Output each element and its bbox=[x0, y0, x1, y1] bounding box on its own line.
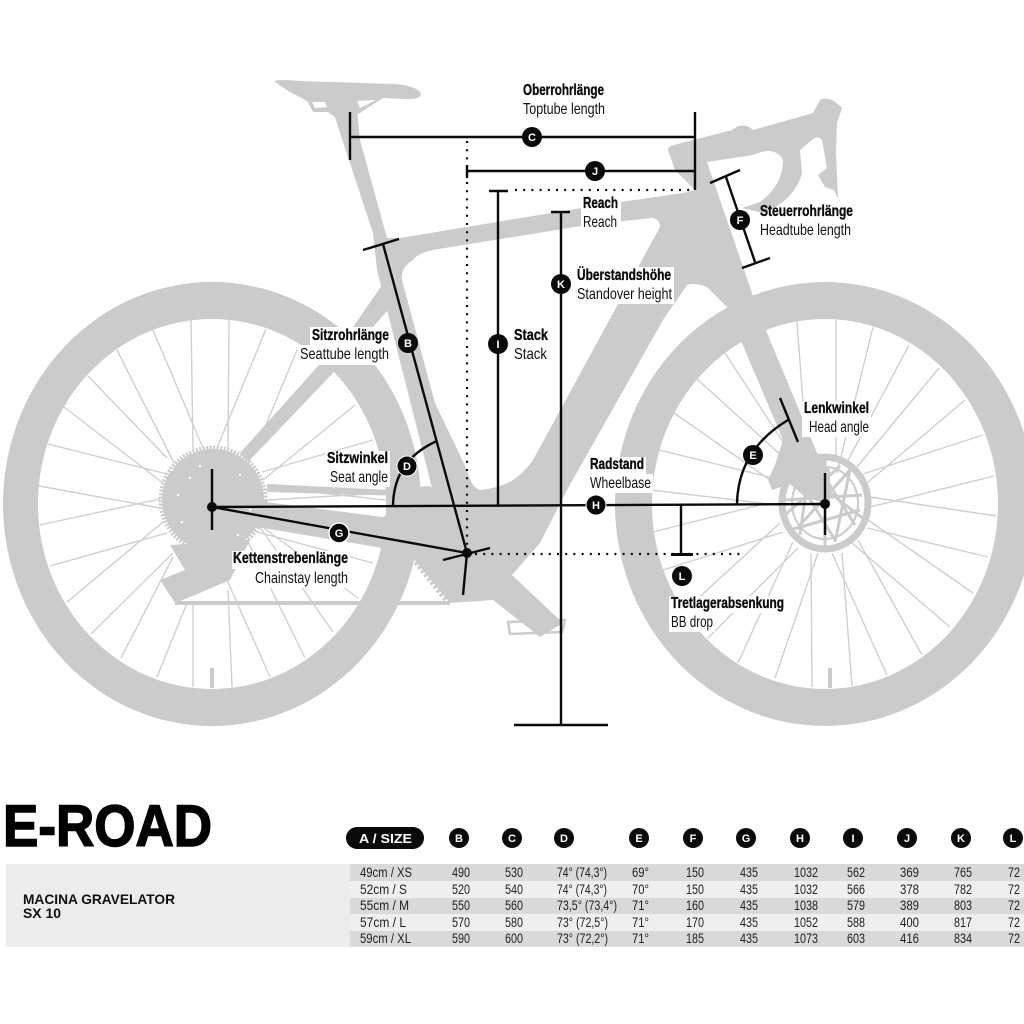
dimension C: toptube length: C bbox=[528, 132, 536, 144]
label: standover height: Standover height bbox=[577, 286, 672, 303]
fork and brake caliper bbox=[735, 293, 830, 505]
row 52cm: 540 bbox=[505, 882, 523, 897]
dimension G: chainstay length: G bbox=[335, 528, 343, 540]
label: wheelbase: Radstand bbox=[590, 456, 644, 473]
dimension E: head angle bbox=[737, 398, 798, 504]
dimension G: chainstay length bbox=[212, 507, 472, 558]
row 55cm bbox=[360, 898, 1020, 913]
label: stack bbox=[514, 327, 548, 363]
row 55cm: 72 bbox=[1008, 898, 1020, 913]
row 57cm: 73° (72,5°) bbox=[557, 915, 608, 930]
row 52cm: 70° bbox=[632, 882, 649, 897]
row 52cm bbox=[360, 882, 1020, 897]
row 59cm: 603 bbox=[847, 931, 865, 946]
column badges: L bbox=[1010, 833, 1017, 845]
label: seattube length: Sitzrohrlänge bbox=[312, 327, 389, 344]
label: reach: Reach bbox=[583, 214, 617, 231]
title: E-ROAD bbox=[3, 794, 212, 859]
table header bbox=[346, 827, 1023, 849]
dimension K: standover height bbox=[514, 212, 608, 725]
dimension F: headtube length: F bbox=[737, 215, 744, 227]
row 57cm bbox=[360, 915, 1020, 930]
label: BB drop: Tretlagerabsenkung bbox=[671, 595, 784, 612]
row 57cm: 588 bbox=[847, 915, 865, 930]
rear wheel spokes bbox=[39, 320, 385, 687]
row 49cm: 150 bbox=[686, 865, 704, 880]
row 55cm: 160 bbox=[686, 898, 704, 913]
label: wheelbase bbox=[588, 456, 653, 493]
label: head angle bbox=[802, 400, 871, 437]
row 59cm: 185 bbox=[686, 931, 704, 946]
label: headtube length: Steuerrohrlänge bbox=[760, 203, 853, 220]
valves bbox=[210, 668, 832, 688]
geometry table bbox=[350, 864, 1024, 947]
row 49cm: 74° (74,3°) bbox=[557, 865, 607, 880]
row 49cm: 72 bbox=[1008, 865, 1020, 880]
row 49cm: 765 bbox=[954, 865, 972, 880]
row 59cm: 59cm / XL bbox=[360, 931, 411, 946]
model panel bbox=[6, 864, 350, 947]
row 57cm: 170 bbox=[686, 915, 704, 930]
column badges: C bbox=[508, 833, 516, 845]
row 52cm: 782 bbox=[954, 882, 972, 897]
row 52cm: 150 bbox=[686, 882, 704, 897]
row 52cm: 52cm / S bbox=[360, 882, 407, 897]
row 57cm: 435 bbox=[740, 915, 758, 930]
column badges: E bbox=[635, 833, 643, 845]
row 55cm: 435 bbox=[740, 898, 758, 913]
label: standover height bbox=[575, 265, 674, 304]
row 55cm: 579 bbox=[847, 898, 865, 913]
dimension B: seattube length bbox=[363, 239, 490, 595]
column badges: I bbox=[851, 833, 855, 845]
label: seat angle bbox=[325, 450, 390, 487]
front wheel rim bbox=[615, 282, 1024, 726]
row 55cm: 803 bbox=[954, 898, 972, 913]
row 52cm: 1032 bbox=[794, 882, 818, 897]
row 55cm: 1038 bbox=[794, 898, 818, 913]
row 49cm: 1032 bbox=[794, 865, 818, 880]
row 52cm: 72 bbox=[1008, 882, 1020, 897]
label: BB drop: BB drop bbox=[671, 614, 713, 631]
row 52cm: 74° (74,3°) bbox=[557, 882, 607, 897]
row 59cm: 1073 bbox=[794, 931, 818, 946]
row 49cm: 369 bbox=[900, 865, 919, 880]
lower stay band bbox=[267, 484, 440, 497]
rear derailleur bbox=[160, 540, 250, 603]
rear wheel rim bbox=[3, 282, 421, 726]
frame, stem and handlebar bbox=[250, 99, 842, 637]
row 52cm: 520 bbox=[452, 882, 470, 897]
column badges: F bbox=[690, 833, 697, 845]
row 57cm: 71° bbox=[632, 915, 649, 930]
row 49cm bbox=[360, 865, 1020, 880]
model name bbox=[23, 891, 175, 921]
label: toptube length bbox=[523, 82, 605, 118]
dimension B: seattube length: B bbox=[404, 338, 412, 350]
dimension H: wheelbase: H bbox=[592, 500, 600, 512]
row 57cm: 400 bbox=[900, 915, 919, 930]
chainring teeth bbox=[413, 558, 449, 603]
row 59cm: 435 bbox=[740, 931, 758, 946]
label: chainstay length bbox=[232, 550, 350, 588]
label: seattube length bbox=[298, 327, 391, 365]
dimension L: BB drop bbox=[671, 505, 693, 586]
column badges: B bbox=[455, 833, 463, 845]
dimension I: stack: I bbox=[496, 339, 500, 351]
saddle bbox=[274, 80, 421, 117]
label: seat angle: Sitzwinkel bbox=[327, 450, 388, 467]
dimension D: seat angle bbox=[393, 441, 437, 505]
column badges: H bbox=[796, 833, 804, 845]
chain bbox=[175, 601, 450, 605]
column badges bbox=[449, 828, 1023, 848]
row backgrounds bbox=[350, 864, 1024, 947]
row 57cm: 570 bbox=[452, 915, 470, 930]
label: head angle: Head angle bbox=[809, 419, 869, 436]
row 49cm: 490 bbox=[452, 865, 470, 880]
row 55cm: 560 bbox=[505, 898, 523, 913]
row 59cm: 600 bbox=[505, 931, 523, 946]
row 59cm: 73° (72,2°) bbox=[557, 931, 608, 946]
bicycle silhouette bbox=[3, 80, 1024, 726]
label: seattube length: Seattube length bbox=[300, 346, 389, 363]
label: standover height: Überstandshöhe bbox=[577, 265, 671, 284]
label: stack: Stack bbox=[514, 346, 548, 363]
size pill bbox=[346, 827, 424, 849]
row 55cm: 550 bbox=[452, 898, 470, 913]
row 59cm: 71° bbox=[632, 931, 649, 946]
row 57cm: 580 bbox=[505, 915, 523, 930]
dimension H: wheelbase bbox=[207, 469, 830, 535]
dimension E: head angle: E bbox=[749, 450, 757, 462]
size pill: A / SIZE bbox=[359, 831, 412, 846]
row 59cm bbox=[360, 931, 1020, 946]
label: headtube length bbox=[760, 203, 853, 239]
column badges: J bbox=[904, 833, 910, 845]
label: seat angle: Seat angle bbox=[330, 469, 388, 486]
row 59cm: 590 bbox=[452, 931, 470, 946]
row 52cm: 566 bbox=[847, 882, 865, 897]
dimension F: headtube length bbox=[710, 170, 770, 268]
label: reach bbox=[581, 195, 621, 232]
reference dotted lines bbox=[467, 141, 742, 554]
column badges: D bbox=[560, 833, 568, 845]
row 49cm: 49cm / XS bbox=[360, 865, 412, 880]
dimension K: standover height: K bbox=[557, 279, 565, 291]
label: BB drop bbox=[669, 595, 786, 632]
front wheel spokes bbox=[651, 320, 996, 687]
kickstand foot bbox=[508, 620, 565, 634]
row 49cm: 69° bbox=[632, 865, 649, 880]
row 52cm: 435 bbox=[740, 882, 758, 897]
dimension J: reach: J bbox=[592, 166, 598, 178]
dimension L: BB drop: L bbox=[679, 571, 686, 583]
row 59cm: 416 bbox=[900, 931, 919, 946]
seat stay bbox=[240, 285, 388, 462]
column badges: K bbox=[957, 833, 965, 845]
label: toptube length: Toptube length bbox=[523, 101, 605, 118]
row 57cm: 57cm / L bbox=[360, 915, 406, 930]
dimension C: toptube length bbox=[350, 112, 695, 190]
row 55cm: 55cm / M bbox=[360, 898, 409, 913]
label: reach: Reach bbox=[583, 195, 618, 212]
row 59cm: 834 bbox=[954, 931, 972, 946]
label: wheelbase: Wheelbase bbox=[590, 475, 651, 492]
dimension I: stack bbox=[488, 191, 508, 507]
label: head angle: Lenkwinkel bbox=[804, 400, 869, 417]
row 55cm: 71° bbox=[632, 898, 649, 913]
column badges: G bbox=[742, 833, 750, 845]
row 52cm: 378 bbox=[900, 882, 919, 897]
row 57cm: 1052 bbox=[794, 915, 818, 930]
label: headtube length: Headtube length bbox=[760, 222, 851, 239]
model name: MACINA GRAVELATOR bbox=[23, 891, 175, 907]
row 49cm: 435 bbox=[740, 865, 758, 880]
front brake disc bbox=[782, 457, 868, 550]
row 55cm: 389 bbox=[900, 898, 919, 913]
label: chainstay length: Chainstay length bbox=[255, 570, 348, 587]
row 55cm: 73,5° (73,4°) bbox=[557, 898, 617, 913]
model name: SX 10 bbox=[23, 905, 61, 921]
cassette bbox=[161, 448, 265, 552]
row 49cm: 562 bbox=[847, 865, 865, 880]
row 57cm: 72 bbox=[1008, 915, 1020, 930]
label: toptube length: Oberrohrlänge bbox=[523, 82, 604, 99]
dimension D: seat angle: D bbox=[403, 461, 411, 473]
label: chainstay length: Kettenstrebenlänge bbox=[233, 550, 348, 567]
row 49cm: 530 bbox=[505, 865, 523, 880]
label: stack: Stack bbox=[514, 327, 548, 344]
row 57cm: 817 bbox=[954, 915, 972, 930]
row 59cm: 72 bbox=[1008, 931, 1020, 946]
dimension J: reach bbox=[467, 161, 695, 181]
